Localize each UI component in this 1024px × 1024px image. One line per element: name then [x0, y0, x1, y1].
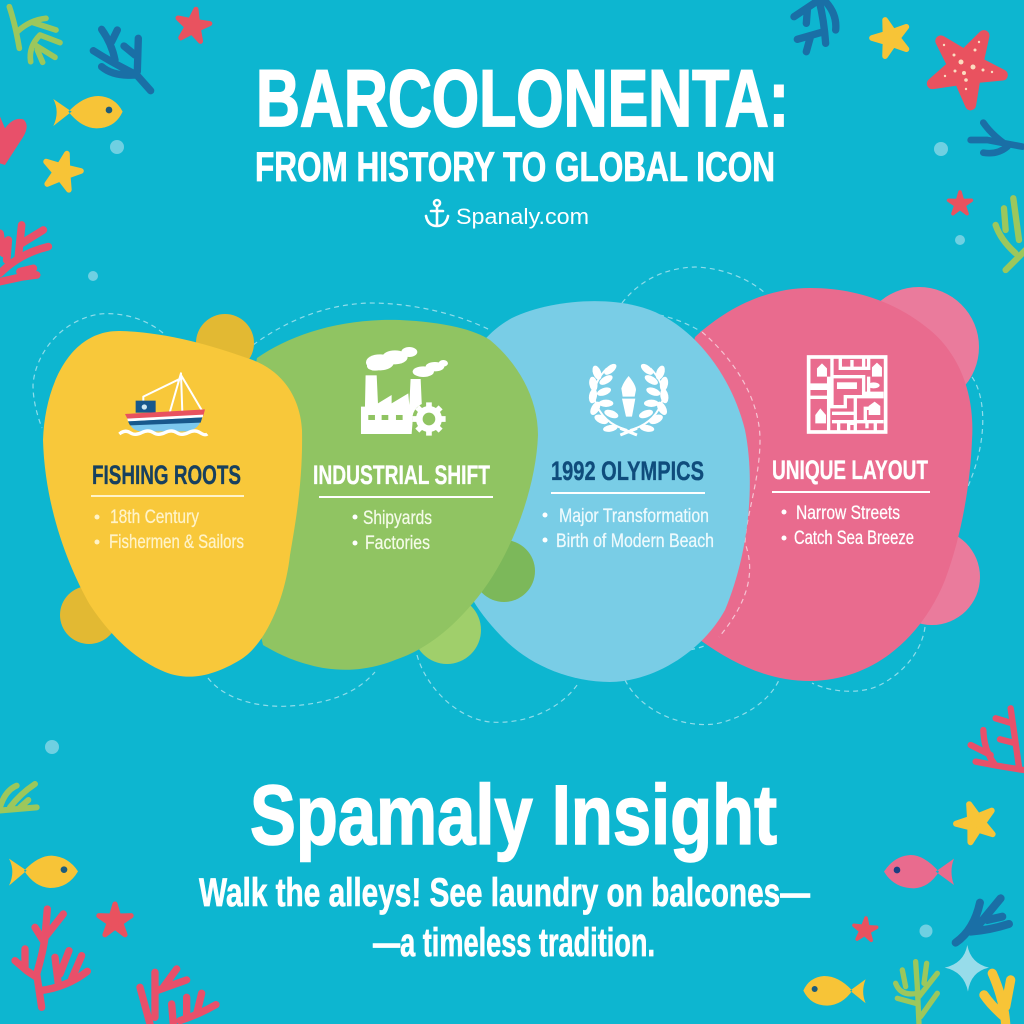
icon: blue coral — [93, 29, 151, 91]
text: 1992 olympics: Birth of Modern Beach — [556, 531, 714, 552]
text: unique layout: Narrow Streets — [796, 503, 900, 524]
icon: yellow fish bottom — [803, 976, 866, 1006]
dashed line over pink blob — [702, 332, 760, 637]
bubbles — [45, 140, 965, 938]
icon: green coral — [9, 7, 60, 62]
icon: red coral — [0, 225, 48, 282]
icon: green coral right — [996, 198, 1024, 270]
panel: 1992 olympics blob — [450, 301, 750, 682]
decorations: bottom left — [0, 784, 216, 1024]
decorations: top right — [794, 0, 1024, 270]
text: unique layout: UNIQUE LAYOUT — [772, 455, 928, 485]
text: 1992 olympics: Major Transformation — [559, 506, 709, 527]
decorations: bottom right — [803, 708, 1024, 1024]
text: fishing roots: FISHING ROOTS — [92, 460, 241, 490]
icon: pink fish — [884, 855, 954, 888]
icon: yellow fish — [53, 96, 123, 128]
text: industrial shift — [313, 460, 493, 554]
text: industrial shift: Shipyards — [363, 508, 432, 529]
text: fishing roots: Fishermen & Sailors — [109, 532, 244, 553]
icon: yellow starfish bottom — [951, 798, 999, 845]
icon: fishing boat — [119, 373, 207, 435]
dashed orbit lines — [33, 267, 983, 725]
icon: yellow starfish top — [868, 14, 913, 58]
icon: red coral right — [971, 708, 1024, 770]
icon: yellow coral — [984, 973, 1011, 1024]
text: fishing roots: 18th Century — [110, 507, 199, 528]
blob: yellow back circles — [60, 314, 254, 644]
panel: fishing roots blob — [43, 331, 302, 677]
icon: small red starfish — [175, 6, 212, 42]
text: industrial shift: Factories — [365, 533, 430, 554]
text: 1992 olympics: 1992 OLYMPICS — [551, 456, 704, 486]
text: unique layout — [772, 455, 930, 549]
insight heading: Spamaly Insight — [250, 768, 777, 862]
title: BARCOLONENTA: — [256, 54, 789, 144]
icon: large red starfish — [921, 19, 1015, 111]
right laurel — [630, 362, 670, 433]
blob: green back circles — [413, 540, 535, 664]
icon: torch with laurel — [588, 362, 670, 435]
icon: red coral — [15, 909, 87, 1007]
text: industrial shift: INDUSTRIAL SHIFT — [313, 460, 490, 490]
icon: sparkle — [945, 945, 989, 992]
icon: small red starfish bottom — [853, 917, 877, 941]
icon: anchor — [426, 200, 448, 226]
icon: green seaweed — [0, 784, 37, 811]
icon: blue coral right — [971, 123, 1022, 153]
icon: red starfish bottom — [99, 904, 131, 935]
icon: yellow starfish — [41, 149, 84, 192]
brand name: Spanaly.com — [456, 204, 589, 229]
icon: green coral bottom — [896, 962, 937, 1024]
icon: blue coral top — [794, 0, 836, 52]
torch — [621, 376, 636, 397]
insight text — [199, 871, 810, 965]
subtitle: FROM HISTORY TO GLOBAL ICON — [255, 143, 775, 190]
panel: unique layout blob — [680, 288, 972, 681]
blob: pink back circles — [859, 287, 980, 625]
icon: factory with gear — [361, 347, 448, 436]
icon: street maze map — [809, 357, 886, 433]
icon: red coral bottom — [140, 969, 216, 1024]
panel: industrial shift blob — [230, 320, 538, 670]
text: 1992 olympics — [542, 456, 714, 552]
decorations: top left — [0, 7, 151, 282]
text: fishing roots — [91, 460, 244, 553]
insight text: Walk the alleys! See laundry on balcones— — [199, 871, 810, 915]
left laurel — [588, 362, 627, 433]
icon: yellow fish — [9, 856, 78, 888]
blob cluster — [43, 287, 980, 682]
icon: dark blue coral — [956, 898, 1009, 943]
insight text: —a timeless tradition. — [373, 921, 655, 965]
icon: small red starfish right — [949, 192, 971, 214]
icon: red heart coral — [0, 117, 27, 165]
text: unique layout: Catch Sea Breeze — [794, 528, 914, 549]
